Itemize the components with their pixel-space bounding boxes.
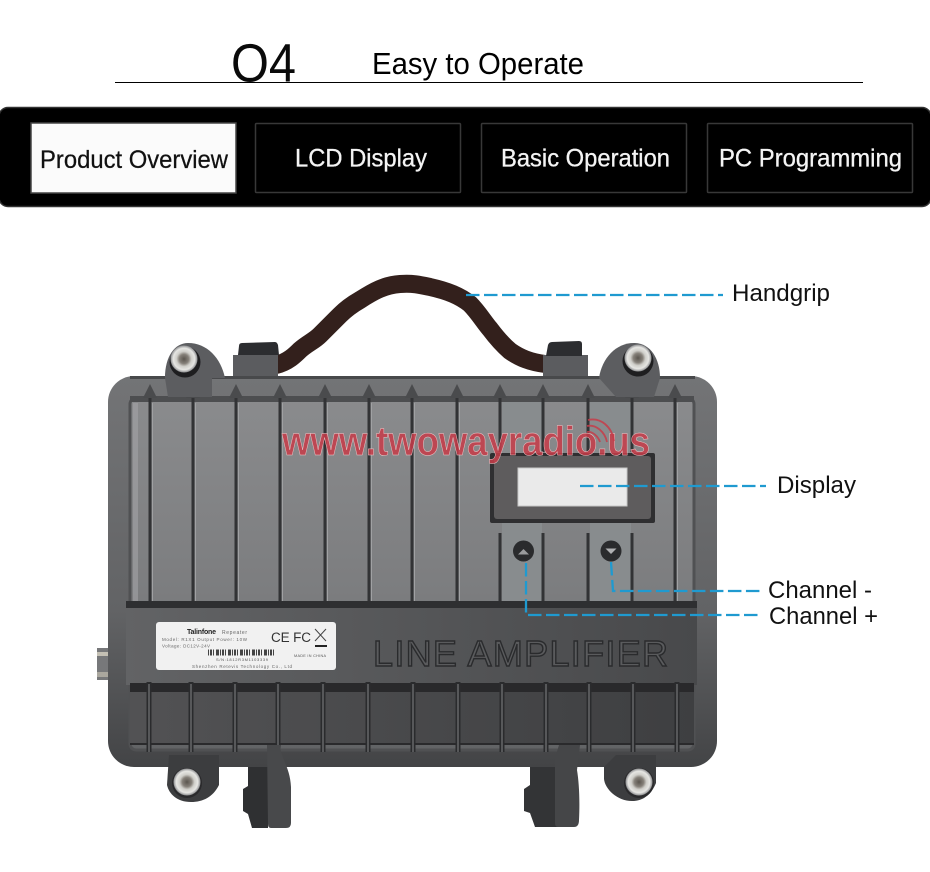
callout: Handgrip: Handgrip [732,280,830,307]
tab: PC Programming: PC Programming [719,144,902,172]
tab: Basic Operation [482,124,686,192]
product label sticker: Voltage: DC12V-24V [162,644,210,648]
tab: Product Overview (active): Product Overview [40,146,229,174]
button: channel down [600,540,622,562]
tab: LCD Display: LCD Display [295,144,427,172]
recessed panels near display [502,402,631,602]
product label sticker: Model: R1X1 Output Power: 10W [162,637,248,642]
mounting screw: bottom right [624,768,654,798]
tab: PC Programming [708,124,912,192]
callout: Channel -: Channel - [768,577,872,604]
product label sticker: MADE IN CHINA [294,654,326,658]
product label sticker: Repeater [222,630,247,636]
title: 04 Easy to Operate: O4 [231,34,296,94]
navigation bar [0,108,930,206]
LCD display [490,453,655,523]
callout: Channel - [611,562,872,604]
watermark: www.twowayradio.us [281,418,650,464]
title: 04 Easy to Operate [115,34,863,94]
callout: Channel + [526,563,878,630]
handle mounts [233,341,588,379]
label band [126,606,697,685]
handgrip strap [276,284,545,365]
product label sticker: Talinfone [187,629,216,636]
mounting screw: top right [622,344,654,376]
top mounting ears [165,343,660,397]
upper ribs [143,384,682,610]
embossed text: LINE AMPLIFIER: LINE AMPLIFIER [373,633,668,674]
top ledge [130,396,694,402]
bottom mounting ears [167,755,656,802]
enclosure body [108,376,717,767]
product label sticker: S/N:1812R3M1103339 [216,657,269,662]
lower ribs [149,682,677,752]
product photo: repeater [97,284,717,828]
inner panel [130,398,694,750]
product label sticker: CE FC [271,630,311,645]
tab: Basic Operation: Basic Operation [501,144,670,172]
product label sticker [156,622,336,670]
tab: LCD Display [256,124,460,192]
tab: Product Overview (active) [31,123,236,193]
mounting screw: bottom left [172,768,202,798]
bottom latch arms [267,745,580,828]
callout: Channel +: Channel + [769,603,878,630]
connector [97,648,109,680]
lower recess [130,686,694,744]
title: 04 Easy to Operate: Easy to Operate [372,46,584,81]
callout: Display: Display [777,472,856,499]
bottom latch rollers [243,765,559,828]
mounting screw: top left [170,346,200,378]
button: channel up [513,540,534,562]
product label sticker: Shenzhen Retevis Technology Co., Ltd [192,664,292,669]
